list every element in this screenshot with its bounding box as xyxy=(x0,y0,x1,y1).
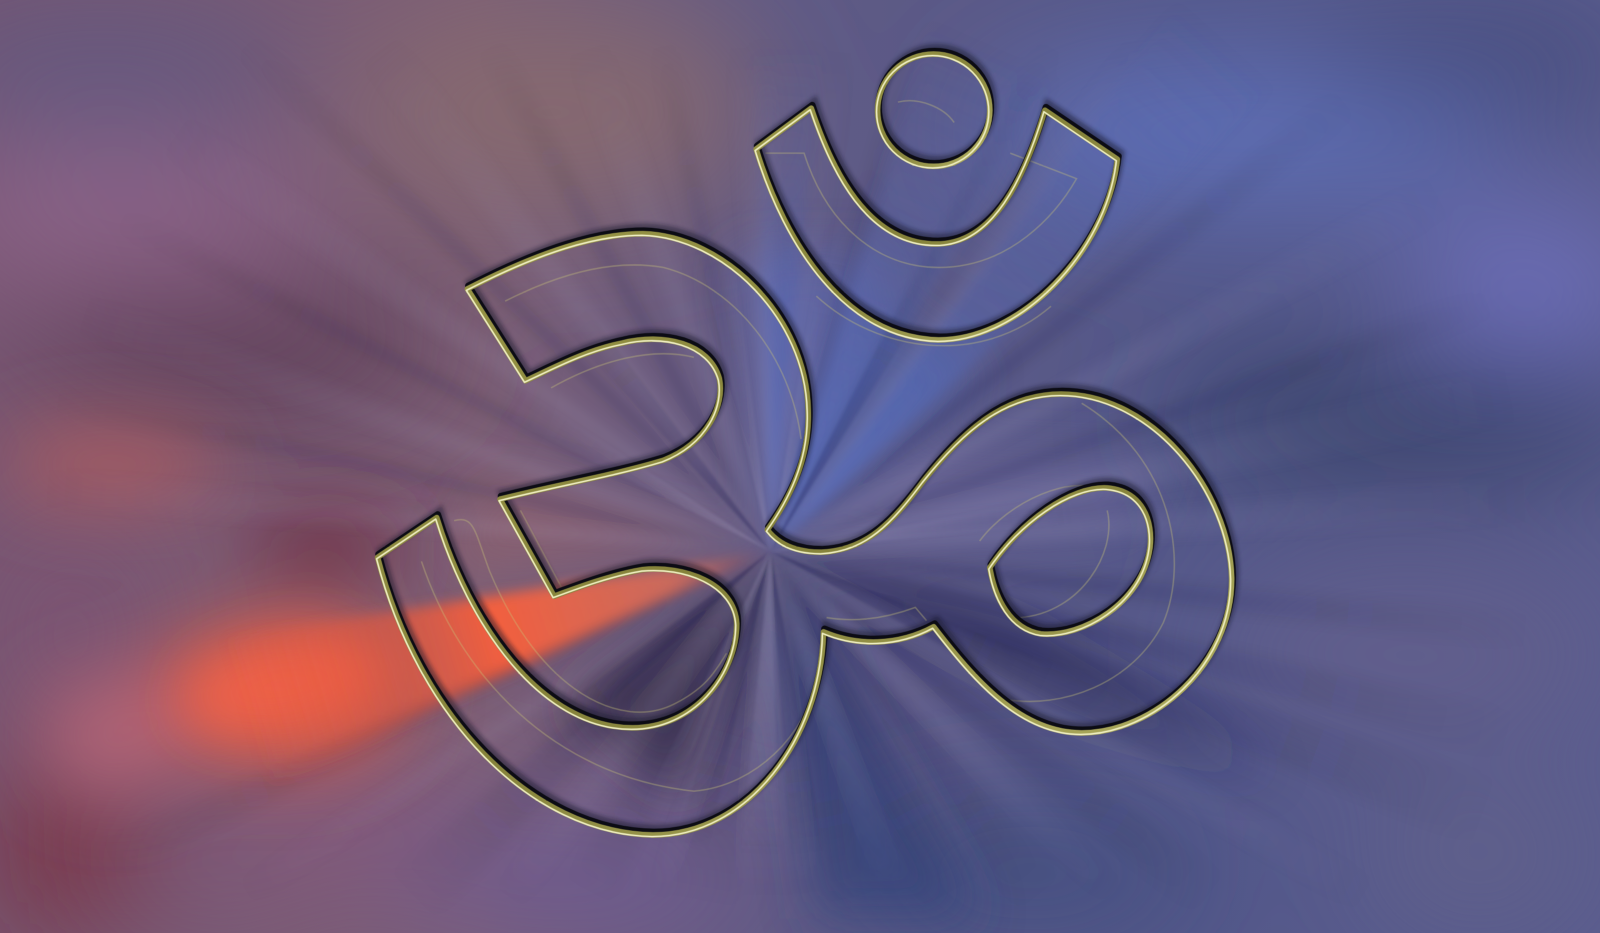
om symbol: main body outline xyxy=(377,231,1233,837)
om symbol: bindu circle xyxy=(877,51,991,168)
broad sector tints around centre xyxy=(449,255,1276,919)
soft shadow of om outline xyxy=(381,48,1235,829)
om symbol: teardrop counter xyxy=(989,485,1152,636)
fine short streaks near centre xyxy=(497,247,1076,858)
faint inner reflection lines xyxy=(421,101,1174,791)
om symbol: crescent bowl xyxy=(755,105,1118,341)
